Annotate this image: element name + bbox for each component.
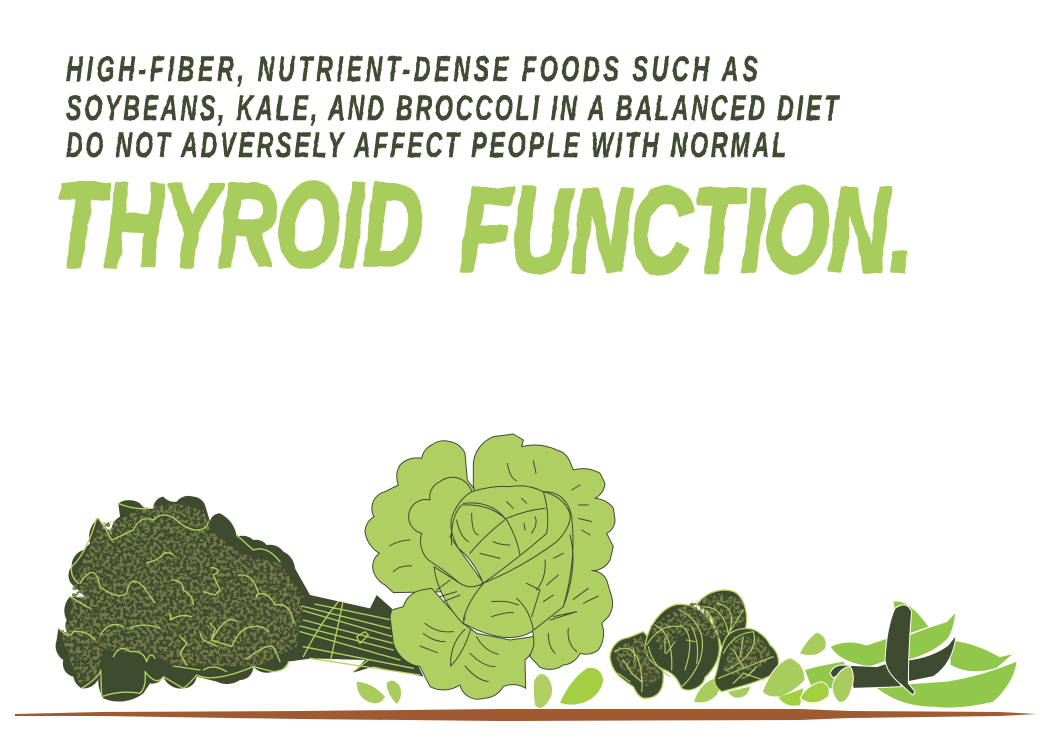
- middle pod: [805, 662, 857, 692]
- ground leaf one: [534, 674, 552, 708]
- kale leaf texture: [60, 503, 303, 685]
- pod upper centre: [893, 601, 928, 637]
- intro sentence: DO NOT ADVERSELY AFFECT PEOPLE WITH NORMAL: [66, 126, 786, 165]
- kale stem lines: [300, 602, 420, 675]
- lower head wedge: [434, 567, 485, 624]
- pod upper right: [908, 612, 956, 660]
- sprout veins: [615, 603, 773, 692]
- dark pod right: [908, 635, 956, 682]
- intro sentence: [66, 50, 840, 165]
- sprout right: [715, 629, 779, 692]
- dark pod upright: [885, 605, 915, 695]
- heading text: [54, 50, 912, 297]
- bottom front leaf: [390, 588, 534, 699]
- intro sentence: HIGH-FIBER, NUTRIENT-DENSE FOODS SUCH AS: [66, 50, 758, 89]
- sprout left: [610, 632, 663, 698]
- light leaves under sprouts: [694, 678, 750, 702]
- large bean: [762, 658, 805, 697]
- illustration: kale: [56, 496, 423, 704]
- cabbage vein lines: [389, 461, 598, 682]
- sprout centre: [645, 604, 719, 690]
- small leaf one: [357, 682, 385, 703]
- cabbage wrapping leaf: [463, 492, 570, 620]
- kale body: [56, 496, 423, 702]
- loose bean: [800, 633, 826, 655]
- right outer leaf: [473, 434, 615, 669]
- left outer leaf: [365, 441, 475, 593]
- pod left: [830, 638, 890, 667]
- front pod: [875, 662, 1017, 708]
- illustration: ground line: [15, 709, 1037, 721]
- cabbage head: [451, 486, 573, 638]
- small leaf two: [387, 681, 401, 704]
- sprout texture: [613, 593, 773, 687]
- emphasis heading: [54, 159, 912, 297]
- illustration: soybeans: [762, 601, 1017, 708]
- emphasis heading: THYROID: [54, 159, 422, 292]
- lower bean: [778, 688, 803, 706]
- pod right: [950, 640, 1014, 672]
- illustration: cabbage: [365, 434, 615, 708]
- kale leaf veins: [58, 503, 294, 697]
- ground leaf two: [560, 668, 603, 705]
- illustration: brussels sprouts: [610, 590, 779, 702]
- intro sentence: SOYBEANS, KALE, AND BROCCOLI IN A BALANCED DIET: [66, 89, 840, 128]
- inner left leaf: [409, 477, 483, 587]
- pale bean: [832, 666, 853, 702]
- dark pod horizontal: [830, 663, 902, 688]
- sprout top right: [697, 590, 747, 648]
- oval bean: [800, 682, 829, 703]
